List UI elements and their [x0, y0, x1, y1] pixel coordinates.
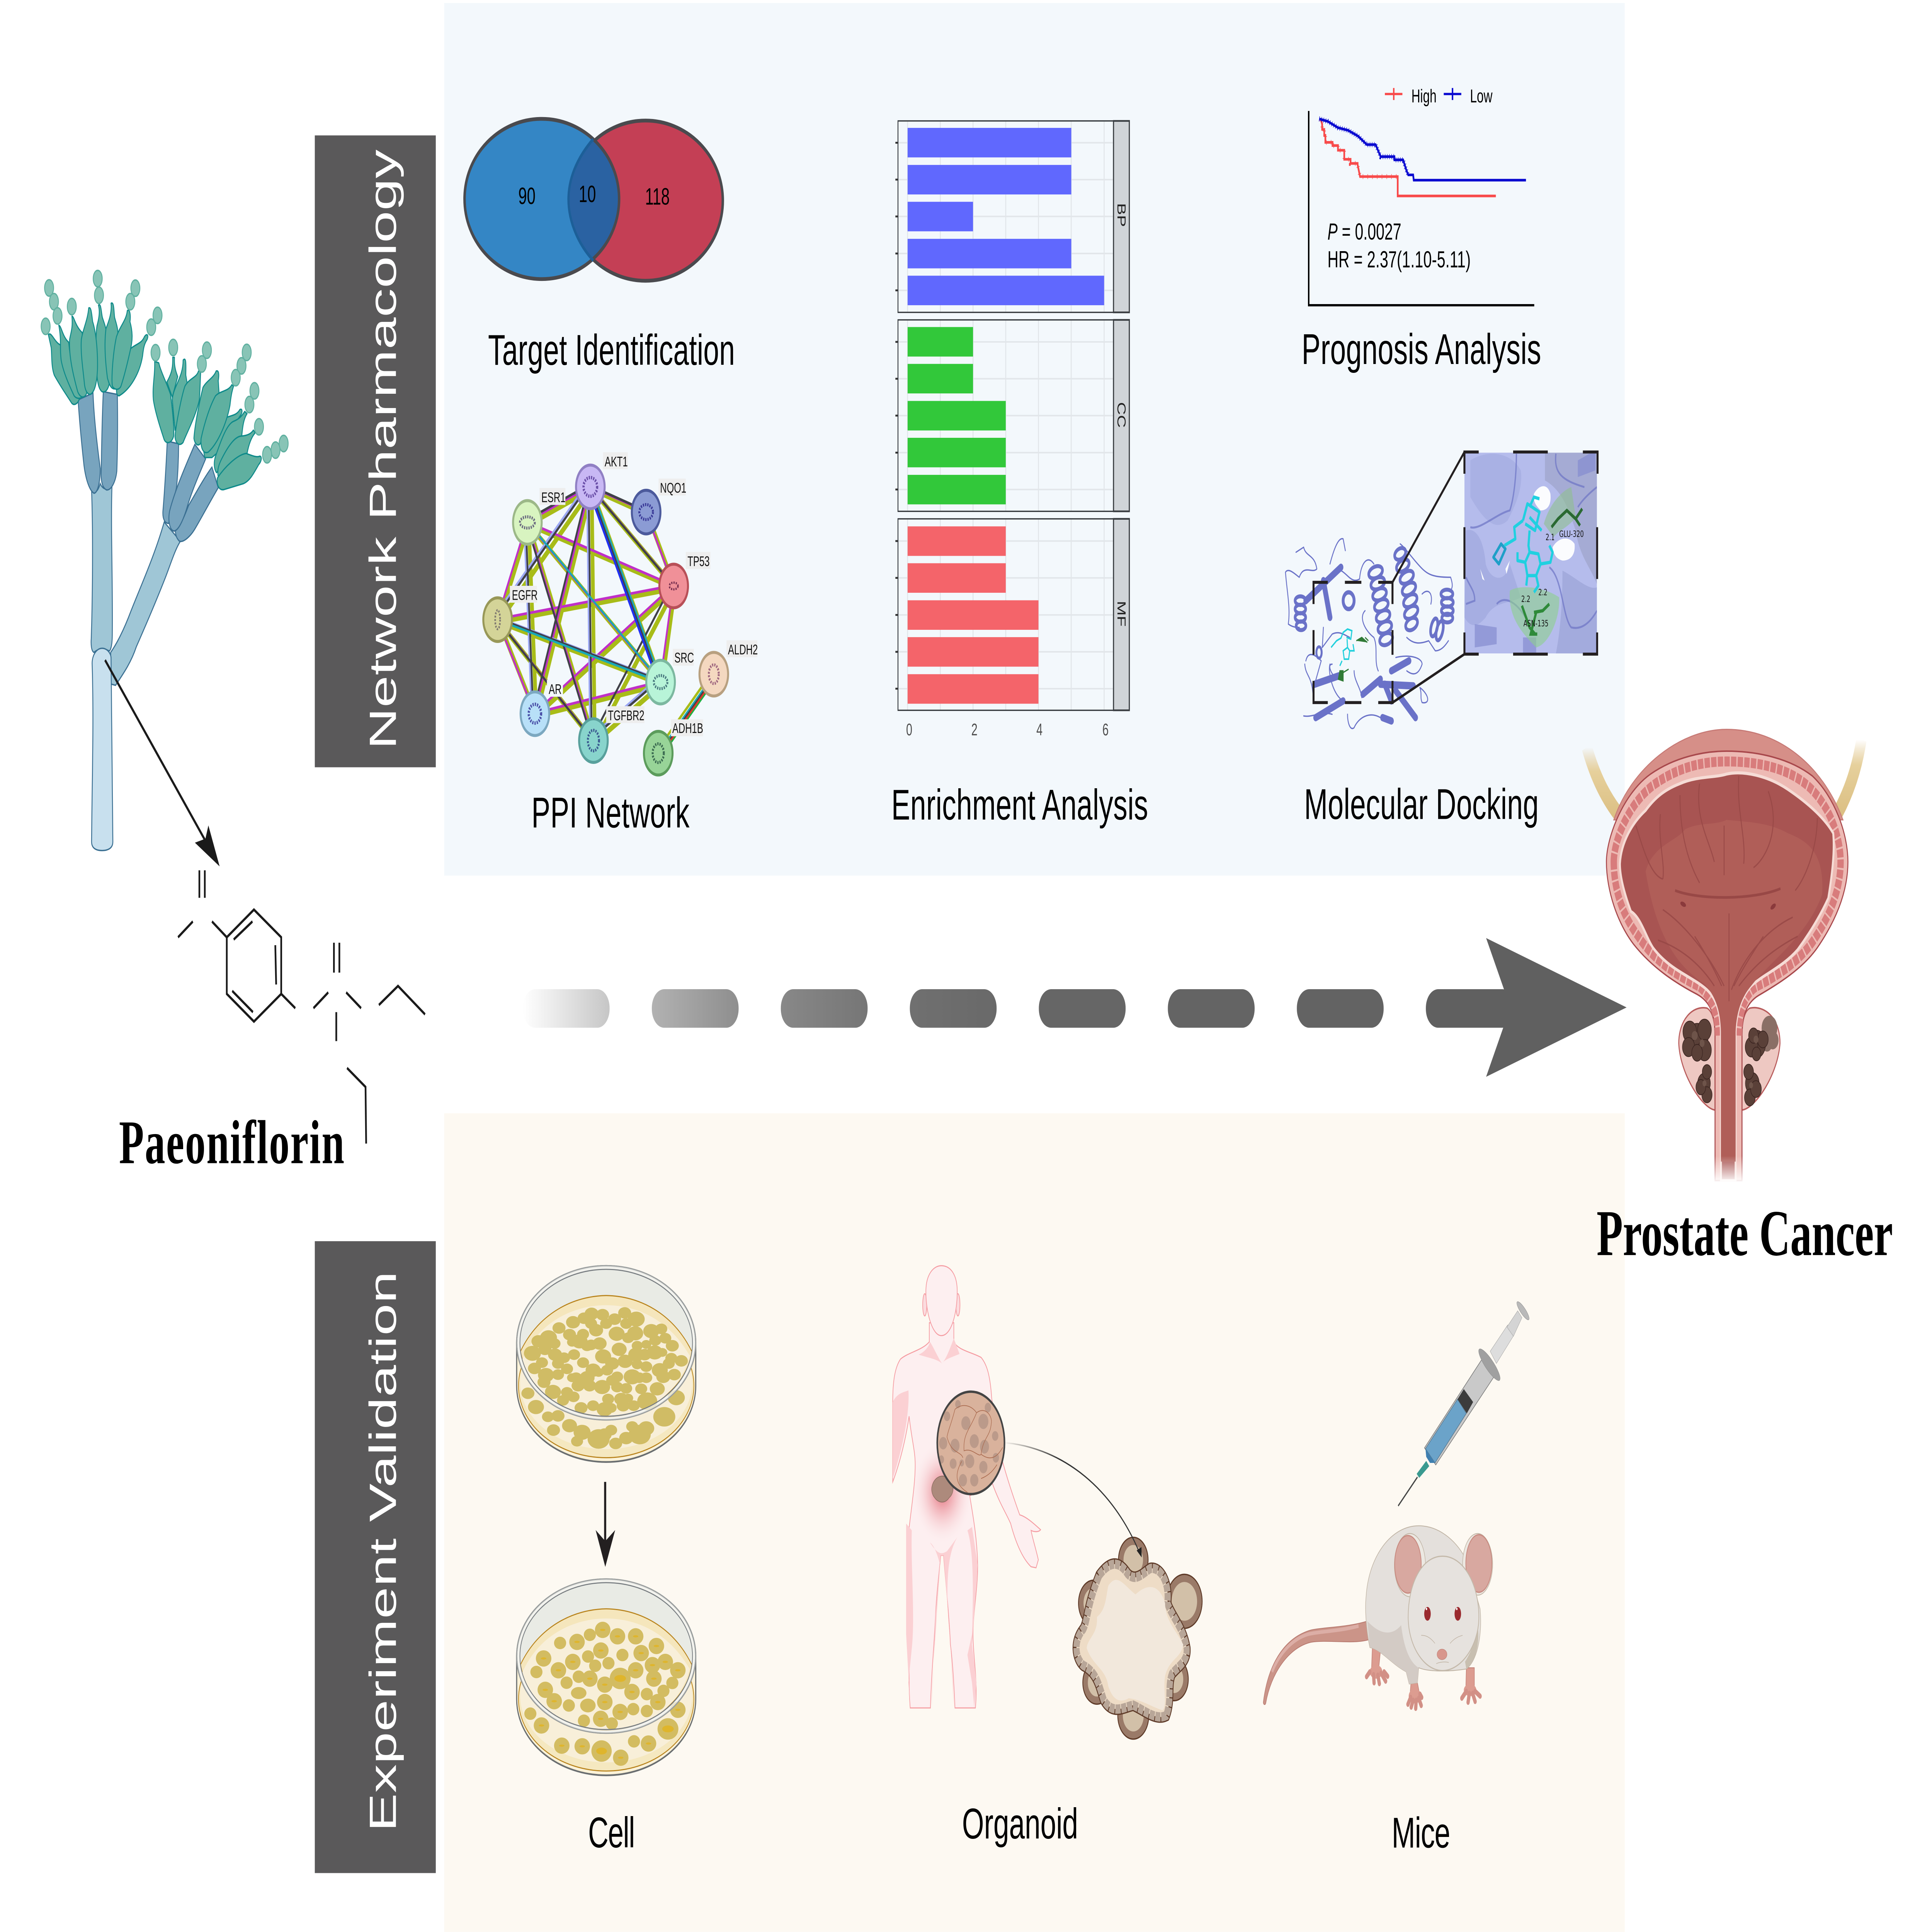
legend	[1385, 86, 1493, 107]
stalks	[91, 484, 180, 850]
label: Target Identification: Target Identification	[488, 326, 735, 374]
node: EGFR	[483, 586, 537, 641]
facet: CC	[895, 320, 1129, 511]
protein ribbon	[1286, 539, 1453, 728]
node: ADH1B	[644, 719, 703, 775]
heading: Experiment Validation	[315, 1241, 436, 1873]
illustration: petri dish, sparse cells	[517, 1579, 696, 1775]
node: SRC: SRC	[674, 650, 694, 666]
node: AR	[520, 680, 563, 735]
label: Enrichment Analysis: Enrichment Analysis	[891, 781, 1148, 829]
metulae	[78, 392, 218, 541]
organoid	[1077, 1537, 1202, 1739]
venn diagram: target identification: 118	[645, 183, 670, 210]
node: ADH1B: ADH1B	[672, 720, 703, 736]
mouse nose	[1437, 1649, 1447, 1660]
label: Cell: Cell	[588, 1808, 635, 1856]
inset dashed frame	[1464, 452, 1597, 654]
label: Molecular Docking: Molecular Docking	[1304, 780, 1539, 828]
docked ligand	[1493, 497, 1553, 592]
x axis labels: 2	[971, 720, 978, 739]
chart: enrichment bar chart	[895, 121, 1129, 739]
inset close-up	[1464, 450, 1597, 653]
legend: High	[1412, 86, 1437, 107]
ureters	[1587, 740, 1861, 816]
heading: Network Pharmacology	[315, 135, 436, 767]
facet: BP	[895, 121, 1129, 312]
venn diagram: target identification: 10	[579, 181, 596, 207]
tumors	[1682, 1016, 1779, 1106]
venn diagram: target identification	[464, 119, 723, 281]
node: ESR1	[513, 488, 566, 544]
arrow: dashed gradient to prostate cancer	[523, 938, 1627, 1077]
panel: network pharmacology background	[444, 3, 1625, 876]
mouse	[1263, 1526, 1493, 1708]
node: NQO1	[632, 479, 686, 534]
x axis labels: 0	[906, 720, 912, 739]
residue and distance labels: 2.2	[1538, 588, 1548, 598]
facet: MF: MF	[1115, 601, 1128, 627]
label: PPI Network: PPI Network	[531, 789, 690, 837]
label: Prognosis Analysis: Prognosis Analysis	[1302, 325, 1541, 373]
chart: Kaplan-Meier survival curve: P = 0.0027	[1327, 219, 1401, 245]
arrow: fungus to molecule	[105, 660, 219, 866]
mouse legs and toes	[1367, 1648, 1480, 1708]
node: ALDH2: ALDH2	[728, 642, 758, 658]
residue and distance labels	[1521, 529, 1584, 629]
edges	[495, 484, 716, 757]
arrow: between dishes	[596, 1482, 615, 1567]
heading: Experiment Validation: Experiment Validation	[362, 1271, 404, 1832]
bladder wall	[1606, 751, 1848, 1181]
residue and distance labels: 2.1	[1546, 532, 1554, 543]
bladder lumen	[1620, 773, 1834, 1181]
dashed selection box	[1313, 582, 1393, 702]
prostate lobes	[1679, 1008, 1780, 1110]
human body	[893, 1266, 1041, 1708]
node: AKT1	[576, 452, 628, 509]
curved connector	[1006, 1443, 1142, 1558]
node: TGFBR2	[579, 706, 645, 762]
facet: MF	[895, 519, 1129, 710]
legend: Low	[1470, 86, 1493, 107]
x axis labels: 4	[1036, 720, 1043, 739]
x axis labels: 6	[1102, 720, 1109, 739]
label: Mice: Mice	[1392, 1809, 1450, 1857]
mucosal folds	[1636, 776, 1817, 1001]
syringe	[1398, 1299, 1531, 1506]
illustration: petri dish, dense cells	[517, 1266, 696, 1462]
node: TP53: TP53	[687, 553, 709, 569]
mouse ears	[1395, 1534, 1493, 1597]
node: ALDH2	[699, 640, 758, 696]
mouse eyes	[1424, 1607, 1461, 1621]
connector lines	[1393, 452, 1464, 702]
residue and distance labels: ASN-135	[1524, 619, 1548, 629]
venn diagram: target identification: 90	[518, 182, 536, 209]
spores	[41, 270, 288, 463]
x axis labels	[906, 720, 1109, 739]
illustration: bladder and prostate	[1587, 730, 1861, 1184]
chart: Kaplan-Meier survival curve: HR = 2.37(1.10-5.11)	[1327, 247, 1471, 272]
illustration: fungus with branches	[41, 270, 288, 850]
facet: CC: CC	[1115, 402, 1128, 428]
interacting residues	[1551, 509, 1582, 527]
label: Prostate Cancer: Prostate Cancer	[1597, 1197, 1893, 1269]
node: TGFBR2: TGFBR2	[608, 707, 645, 723]
label: Organoid: Organoid	[962, 1799, 1078, 1848]
node: SRC	[646, 649, 694, 704]
residue and distance labels: 2.2	[1521, 594, 1530, 604]
illustration: molecular docking	[1286, 450, 1597, 728]
node: TP53	[659, 552, 711, 608]
flasks: left cluster	[48, 303, 148, 405]
facet: BP: BP	[1115, 203, 1128, 227]
panel: experiment validation background	[444, 1113, 1625, 1932]
bound ligand overview	[1331, 629, 1354, 666]
mouse tail	[1263, 1621, 1370, 1704]
label: Paeoniflorin: Paeoniflorin	[119, 1108, 344, 1177]
flasks: right cluster	[153, 357, 261, 490]
magnified tissue	[937, 1392, 1005, 1494]
node: NQO1: NQO1	[660, 480, 686, 496]
node: AR: AR	[549, 681, 561, 697]
node: AKT1: AKT1	[605, 454, 628, 469]
node: EGFR: EGFR	[512, 587, 537, 603]
illustration: human body and organoid	[893, 1266, 1202, 1739]
illustration: syringe and mouse	[1263, 1299, 1531, 1708]
molecule: paeoniflorin structure	[178, 870, 425, 1144]
heading: Network Pharmacology: Network Pharmacology	[362, 150, 404, 749]
node: ESR1: ESR1	[541, 489, 566, 505]
network: PPI	[483, 452, 758, 775]
residue and distance labels: GLU-320	[1559, 529, 1584, 539]
chart: Kaplan-Meier survival curve	[1309, 86, 1534, 305]
